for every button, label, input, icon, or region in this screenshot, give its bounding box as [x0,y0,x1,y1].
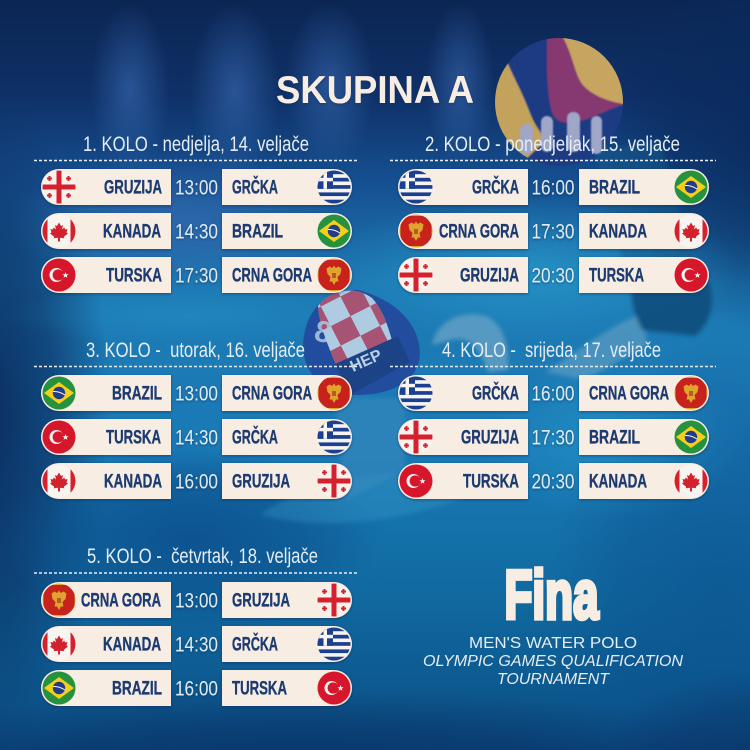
match: Turska vs Kanada 20:30 [398,463,709,499]
match: Gruzija vs Brazil 17:30 [398,419,709,455]
match: Crna Gora vs Kanada 17:30 [398,213,709,249]
match: Gruzija vs Brazil 17:30: BRAZIL [589,428,640,448]
match: Kanada vs Grčka 14:30: KANADA [103,634,161,656]
title: SKUPINA A [276,69,474,112]
match: Crna Gora vs Gruzija 13:00: CRNA GORA [81,590,161,612]
FINA logo: Fina [504,556,599,634]
match: Kanada vs Grčka 14:30 [41,626,352,662]
match: Kanada vs Gruzija 16:00: 16:00 [175,470,218,494]
match: Turska vs Kanada 20:30: 20:30 [532,470,574,494]
match: Grčka vs Brazil 16:00 [398,169,709,205]
match: Kanada vs Brazil 14:30: 14:30 [175,220,218,244]
match: Crna Gora vs Kanada 17:30: KANADA [589,222,647,242]
match: Kanada vs Gruzija 16:00: GRUZIJA [232,472,290,492]
match: Kanada vs Gruzija 16:00 [41,463,352,499]
match: Grčka vs Brazil 16:00: 16:00 [532,176,574,200]
match: Gruzija vs Grčka 13:00: 13:00 [175,176,218,200]
match: Kanada vs Grčka 14:30: GRČKA [232,634,278,656]
water polo ball [495,38,623,166]
match: Turska vs Grčka 14:30: 14:30 [175,426,218,450]
match: Gruzija vs Turska 20:30: GRUZIJA [460,266,519,286]
match: Turska vs Grčka 14:30: TURSKA [106,428,161,448]
match: Brazil vs Turska 16:00: 16:00 [175,678,218,700]
match: Gruzija vs Grčka 13:00: GRČKA [232,176,278,198]
match: Crna Gora vs Gruzija 13:00 [41,582,352,618]
match: Kanada vs Grčka 14:30: 14:30 [175,634,218,656]
panel: round 3 [34,339,358,499]
match: Brazil vs Crna Gora 13:00: BRAZIL [112,384,162,404]
match: Grčka vs Brazil 16:00: GRČKA [472,176,519,198]
player cap: Croatian checkers with 8 and HEP: HEP [348,347,385,376]
match: Turska vs Crna Gora 17:30: TURSKA [106,266,162,286]
match: Gruzija vs Grčka 13:00 [41,169,352,205]
match: Turska vs Grčka 14:30 [41,419,352,455]
match: Gruzija vs Turska 20:30: 20:30 [532,264,574,288]
match: Crna Gora vs Gruzija 13:00: 13:00 [175,590,218,612]
match: Kanada vs Brazil 14:30: KANADA [103,222,161,242]
tournament caption: OLYMPIC GAMES QUALIFICATION [423,653,683,670]
match: Crna Gora vs Gruzija 13:00: GRUZIJA [232,590,290,612]
panel: round 4 [390,339,716,499]
match: Gruzija vs Brazil 17:30: 17:30 [532,426,574,450]
tournament caption [423,635,683,688]
match: Turska vs Crna Gora 17:30 [41,257,352,293]
match: Kanada vs Brazil 14:30: BRAZIL [232,222,283,242]
tournament caption: MEN'S WATER POLO [469,635,637,652]
match: Grčka vs Crna Gora 16:00 [398,375,709,411]
match: Gruzija vs Grčka 13:00: GRUZIJA [104,178,162,198]
panel: round 2 [390,133,716,293]
match: Brazil vs Turska 16:00: BRAZIL [112,678,162,700]
tournament caption: TOURNAMENT [497,671,610,688]
match: Turska vs Grčka 14:30: GRČKA [232,426,278,448]
player cap: Croatian checkers with 8 and HEP: 8 [312,315,335,350]
fingers holding the ball [520,112,602,154]
match: Brazil vs Turska 16:00: TURSKA [232,678,287,700]
match: Grčka vs Crna Gora 16:00: 16:00 [532,382,574,406]
match: Crna Gora vs Kanada 17:30: 17:30 [532,220,574,244]
match: Turska vs Kanada 20:30: TURSKA [463,472,519,492]
match: Gruzija vs Brazil 17:30: GRUZIJA [461,428,519,448]
player cap: Croatian checkers with 8 and HEP [303,290,420,395]
match: Brazil vs Crna Gora 13:00 [41,375,352,411]
match: Kanada vs Brazil 14:30 [41,213,352,249]
panel: round 5 [34,545,358,706]
match: Grčka vs Brazil 16:00: BRAZIL [589,178,640,198]
match: Gruzija vs Turska 20:30: TURSKA [589,266,644,286]
round 3 heading: 3. KOLO - utorak, 16. veljače [86,339,305,362]
round 4 heading: 4. KOLO - srijeda, 17. veljače [442,339,661,362]
match: Grčka vs Crna Gora 16:00: CRNA GORA [589,384,669,404]
round 5 heading: 5. KOLO - četvrtak, 18. veljače [87,545,318,568]
match: Kanada vs Gruzija 16:00: KANADA [104,472,162,492]
match: Turska vs Crna Gora 17:30: 17:30 [175,264,218,288]
round 2 heading: 2. KOLO - ponedjeljak, 15. veljače [425,133,680,156]
match: Turska vs Crna Gora 17:30: CRNA GORA [232,266,312,286]
swimmer: arm and torso [335,140,712,500]
match: Gruzija vs Turska 20:30 [398,257,709,293]
match: Brazil vs Crna Gora 13:00: 13:00 [175,382,218,406]
match: Turska vs Kanada 20:30: KANADA [589,472,647,492]
match: Brazil vs Turska 16:00 [41,670,352,706]
panel: round 1 [34,133,358,293]
match: Grčka vs Crna Gora 16:00: GRČKA [472,382,519,404]
round 1 heading: 1. KOLO - nedjelja, 14. veljače [83,133,309,156]
match: Brazil vs Crna Gora 13:00: CRNA GORA [232,384,312,404]
match: Crna Gora vs Kanada 17:30: CRNA GORA [439,222,519,242]
